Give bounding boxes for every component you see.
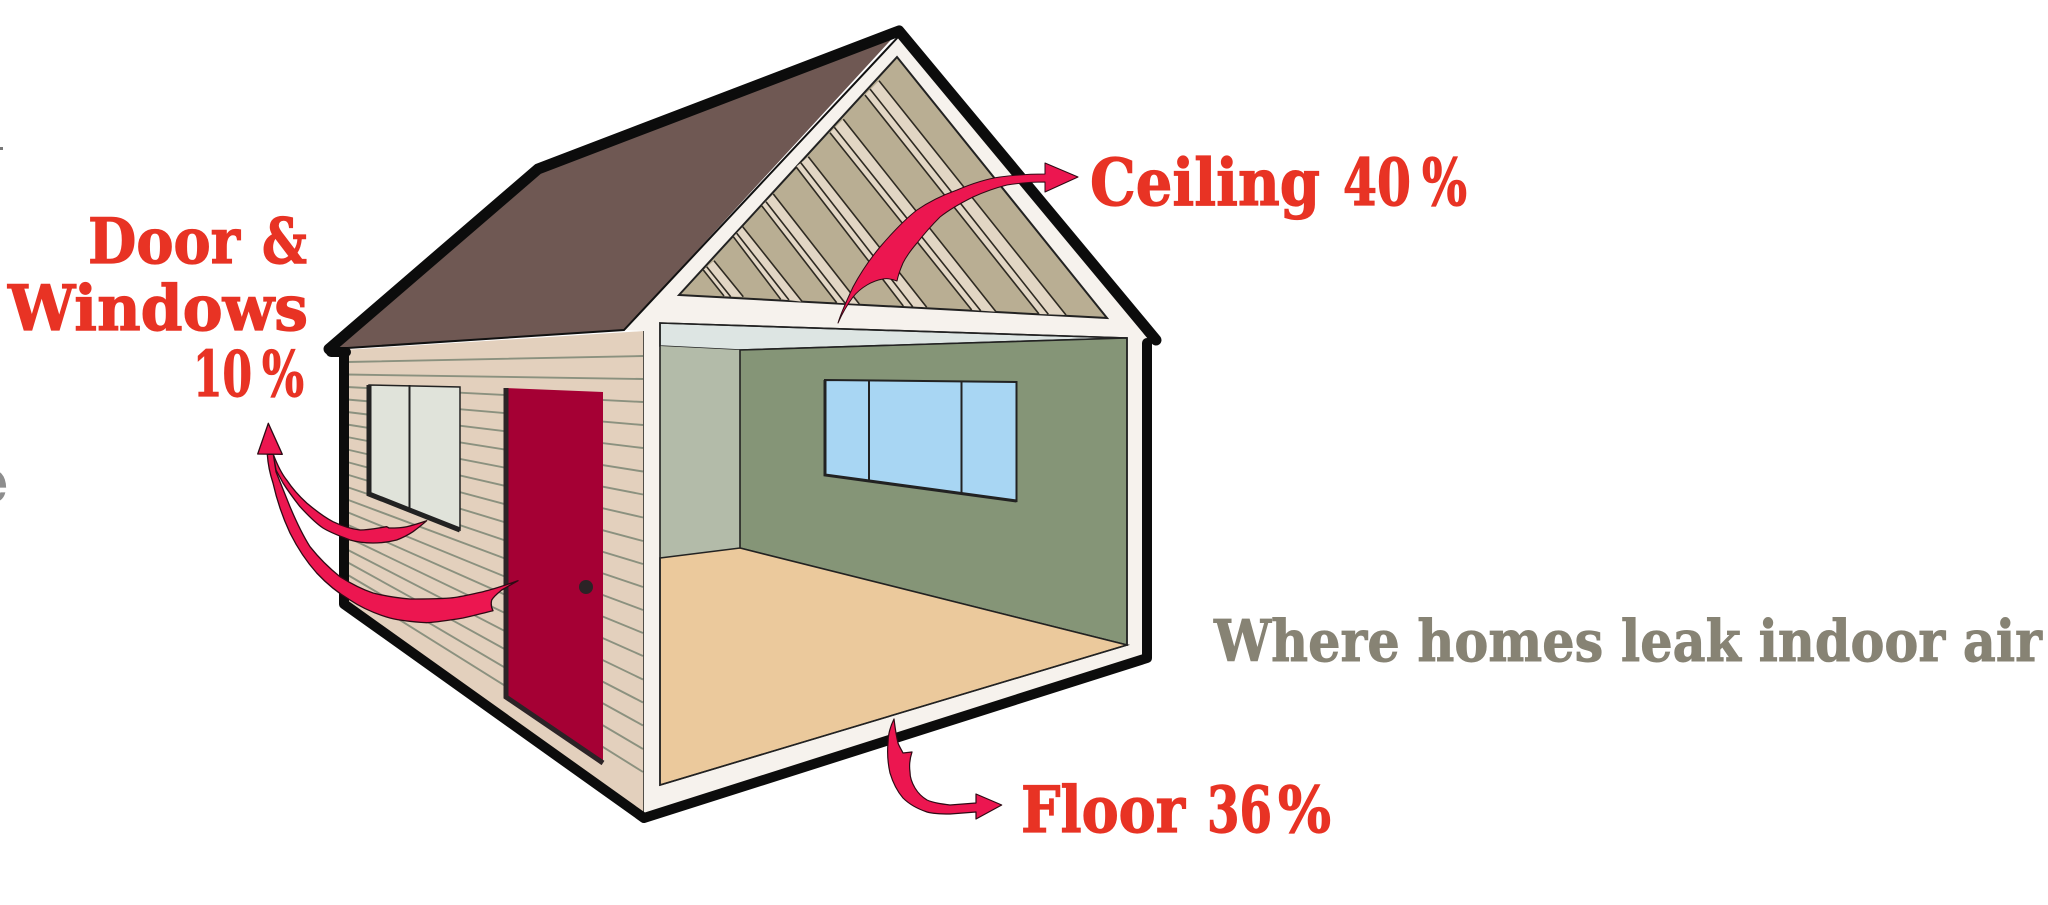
label: door and windows 10%: Door: [88, 204, 241, 278]
label: door and windows 10%: &: [262, 204, 307, 278]
label: door and windows 10%: %: [262, 337, 304, 411]
side window: [369, 385, 460, 530]
door knob: [579, 580, 593, 594]
arrowhead: [258, 423, 282, 454]
door: [504, 388, 603, 763]
roof: [332, 30, 900, 349]
door arrow shaft: [267, 454, 518, 623]
left interior wall: [660, 346, 740, 558]
cropped text fragments at left edge: [0, 147, 9, 517]
label: door and windows 10%: Windows: [7, 271, 308, 345]
arrow: door and window leak: [258, 423, 518, 623]
attic triangle with joists: [679, 57, 1107, 318]
label: door and windows 10%: 10: [193, 337, 252, 411]
arrow: ceiling leak: [838, 163, 1078, 323]
house outline: [329, 31, 1156, 818]
label: ceiling 40%: Ceiling: [1090, 145, 1320, 221]
house illustration: [329, 30, 1156, 818]
label: door and windows 10%: [7, 204, 308, 411]
label: floor 36%: 36: [1207, 773, 1272, 848]
label: ceiling 40%: 40: [1343, 145, 1411, 221]
back wall: [740, 338, 1127, 645]
ceiling: [660, 323, 1127, 350]
side wall with siding: [344, 331, 644, 816]
label: ceiling 40%: %: [1422, 145, 1467, 221]
label: floor 36%: %: [1278, 773, 1331, 848]
floor: [660, 548, 1127, 785]
label: floor 36%: Floor: [1021, 773, 1186, 848]
back window: [825, 380, 1016, 501]
window arrow shaft: [273, 454, 427, 543]
front wall frame: [624, 36, 1152, 815]
arrow: floor leak: [888, 719, 1002, 819]
room interior: [660, 323, 1127, 785]
